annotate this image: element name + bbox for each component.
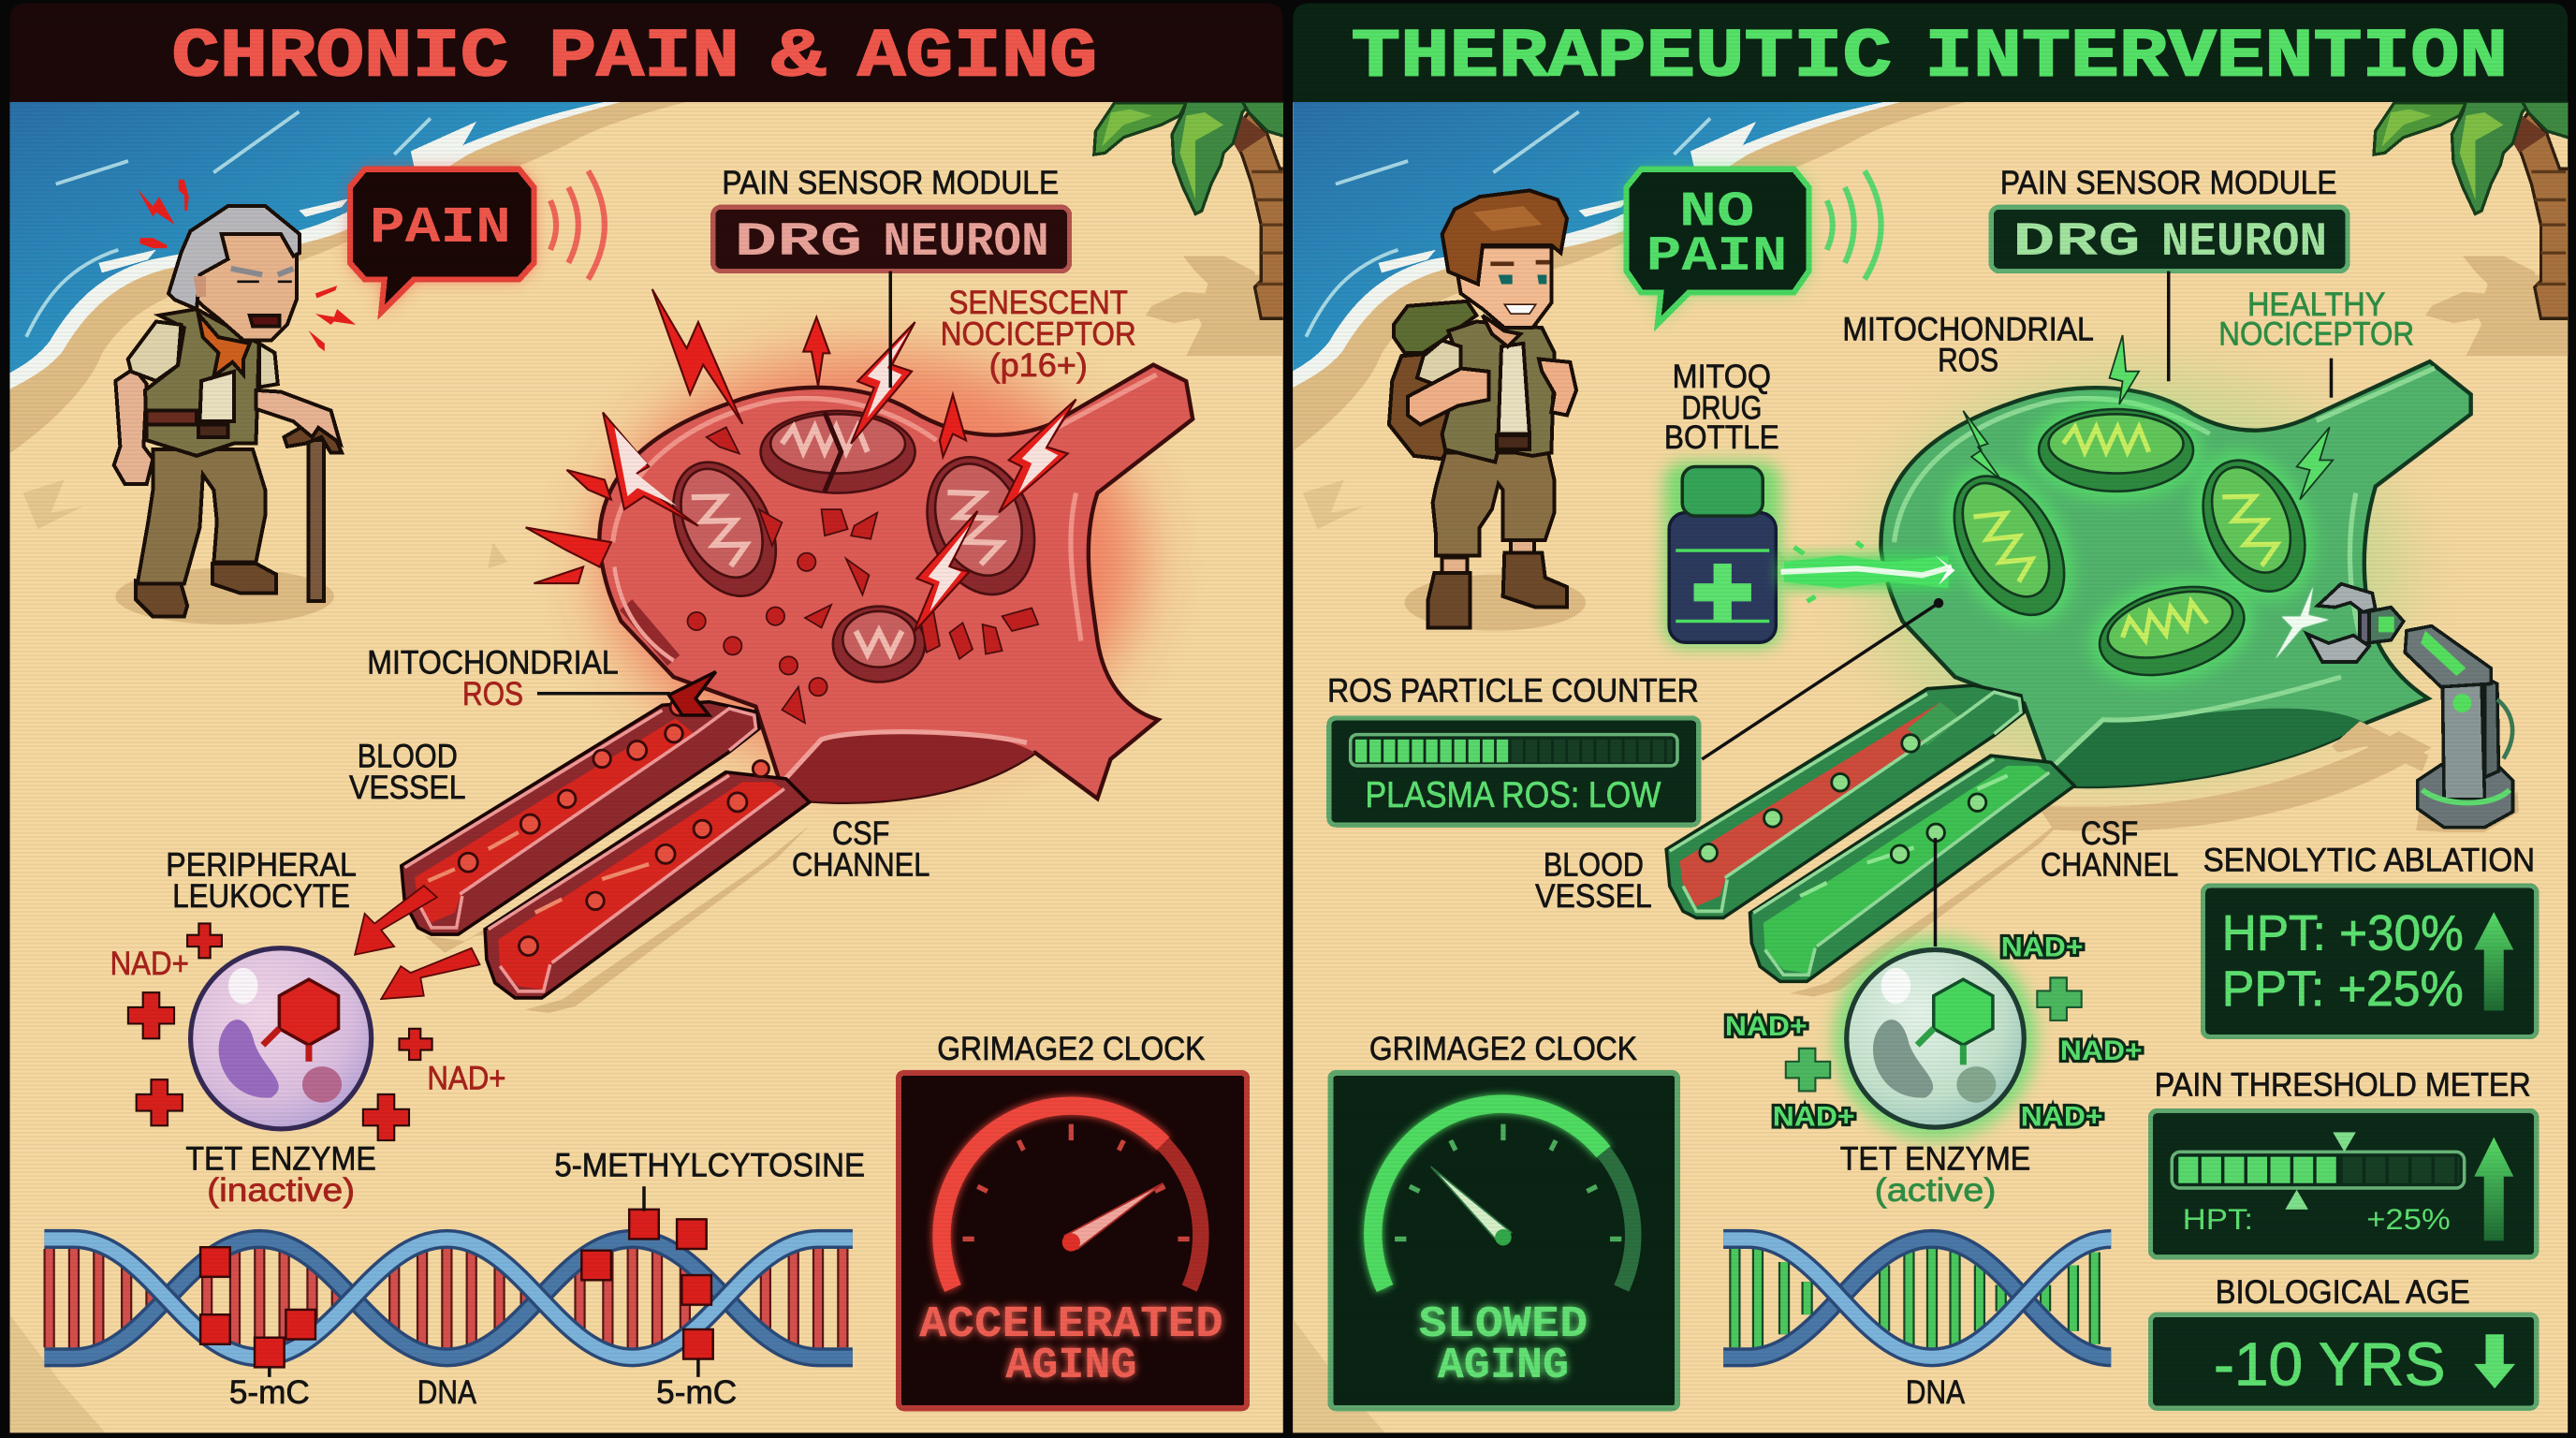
labels: 5-mC and DNA: 5-mC bbox=[656, 1374, 737, 1411]
small green bolts bbox=[1963, 335, 2333, 500]
title right: THERAPEUTIC bbox=[1352, 20, 1892, 97]
mitochondria damaged bbox=[653, 411, 1053, 682]
label: blood vessel: BLOOD bbox=[358, 739, 458, 775]
NAD+ plus signs bbox=[128, 923, 432, 1140]
label: TET enzyme inactive: TET ENZYME bbox=[185, 1141, 376, 1178]
box: DRG neuron bbox=[713, 207, 1070, 271]
label: pain sensor module: PAIN SENSOR MODULE bbox=[2000, 165, 2337, 201]
label: pain threshold meter: PAIN THRESHOLD METER bbox=[2155, 1067, 2531, 1104]
box: DRG neuron: NEURON bbox=[883, 216, 1049, 270]
panel: plasma ROS meter bbox=[1329, 718, 1699, 825]
icon: MitoQ bottle bbox=[1664, 462, 1781, 648]
label: NAD+: NAD+ bbox=[110, 946, 189, 982]
gauge text: ACCELERATED bbox=[919, 1300, 1223, 1350]
label: blood vessel bbox=[349, 739, 466, 806]
leader line: ROS counter to neuron bbox=[1702, 598, 1943, 759]
label: mitochondrial ROS bbox=[367, 645, 670, 712]
methyl groups bbox=[200, 1210, 713, 1367]
label: senolytic ablation: SENOLYTIC ABLATION bbox=[2203, 842, 2535, 878]
label: mitochondrial ROS: ROS bbox=[1938, 343, 1998, 379]
panel: accelerated aging gauge bbox=[899, 1073, 1247, 1408]
beach background right bbox=[1280, 101, 2576, 1436]
panel: chronic pain and aging bbox=[0, 4, 1298, 1436]
icon: down arrow bbox=[2474, 1334, 2515, 1388]
label: CSF channel: CHANNEL bbox=[2041, 847, 2178, 884]
panel: biological age: -10 YRS bbox=[2214, 1330, 2445, 1399]
icon: calm sound waves bbox=[1827, 171, 1881, 279]
title left: & bbox=[771, 20, 826, 97]
label: GrimAge2 clock: GRIMAGE2 CLOCK bbox=[937, 1031, 1206, 1067]
NAD+ tags and plus signs: NAD+ bbox=[1725, 1011, 1808, 1042]
mitochondria healthy bbox=[1918, 400, 2338, 702]
lightning bolts bbox=[526, 289, 1076, 633]
label: blood vessel: VESSEL bbox=[1535, 878, 1652, 915]
heading bar right bbox=[1293, 4, 2568, 102]
box: DRG neuron bbox=[1991, 207, 2348, 271]
panel: pain threshold meter: HPT: bbox=[2183, 1202, 2253, 1236]
panel: threshold gains: PPT: +25% bbox=[2222, 961, 2464, 1017]
beam: drug into neuron bbox=[1781, 542, 1955, 601]
label: TET enzyme active: (active) bbox=[1875, 1172, 1996, 1209]
icon: up arrow bbox=[2474, 1137, 2513, 1240]
NAD+ tags and plus signs: NAD+ bbox=[2021, 1101, 2103, 1132]
label: healthy nociceptor: NOCICEPTOR bbox=[2218, 316, 2414, 353]
title left: AGING bbox=[857, 20, 1097, 97]
gauge text bbox=[1419, 1300, 1588, 1391]
title left: PAIN bbox=[549, 20, 739, 97]
label: GrimAge2 clock: GRIMAGE2 CLOCK bbox=[1369, 1031, 1637, 1067]
box: DRG neuron: NEURON bbox=[2161, 216, 2327, 270]
ROS debris particles bbox=[688, 427, 1038, 723]
labels: 5-mC and DNA: DNA bbox=[417, 1374, 476, 1411]
label: blood vessel: VESSEL bbox=[349, 770, 466, 806]
label: healthy nociceptor bbox=[2218, 286, 2414, 353]
label: pain sensor module: PAIN SENSOR MODULE bbox=[722, 165, 1059, 201]
label: MitoQ drug bottle: DRUG bbox=[1681, 390, 1762, 427]
label: CSF channel: CHANNEL bbox=[792, 847, 929, 884]
panel: therapeutic intervention bbox=[1280, 4, 2576, 1436]
title left: CHRONIC bbox=[171, 20, 508, 97]
label: mitochondrial ROS: MITOCHONDRIAL bbox=[1842, 311, 2094, 347]
panel: threshold gains bbox=[2203, 886, 2537, 1037]
panel: plasma ROS meter: PLASMA ROS: LOW bbox=[1365, 775, 1661, 815]
speech bubble: pain bbox=[350, 169, 534, 312]
label: senescent nociceptor: SENESCENT bbox=[949, 285, 1128, 321]
diagram: senescent neuron bbox=[402, 289, 1193, 1013]
label: peripheral leukocyte: PERIPHERAL bbox=[166, 847, 357, 884]
NAD+ tags and plus signs bbox=[1725, 932, 2143, 1132]
label: blood vessel bbox=[1535, 847, 1652, 915]
icon: up arrow bbox=[2474, 912, 2513, 1010]
label: TET enzyme active: TET ENZYME bbox=[1840, 1141, 2030, 1178]
leukocyte cell active TET enzyme bbox=[1834, 936, 2037, 1140]
title left bbox=[171, 20, 1097, 97]
box: DRG neuron: DRG bbox=[735, 216, 862, 270]
panel: slowed aging gauge bbox=[1331, 1073, 1677, 1408]
label: TET enzyme inactive bbox=[185, 1141, 376, 1209]
label: MitoQ drug bottle: BOTTLE bbox=[1664, 419, 1779, 456]
neuron body bbox=[1881, 361, 2471, 786]
character: young hiker bbox=[1389, 190, 1586, 631]
label: CSF channel: CSF bbox=[832, 815, 889, 852]
label: senescent nociceptor: (p16+) bbox=[989, 347, 1088, 384]
bubble text: PAIN bbox=[370, 200, 511, 257]
NAD+ tags and plus signs: NAD+ bbox=[2001, 932, 2083, 963]
arrows: ROS to leukocyte bbox=[355, 886, 479, 999]
labels: 5-mC and DNA: 5-mC bbox=[229, 1374, 310, 1411]
spark bbox=[2276, 587, 2329, 659]
NAD+ tags and plus signs: NAD+ bbox=[1773, 1101, 1855, 1132]
diagram: healthy neuron bbox=[1666, 335, 2471, 996]
panel: pain threshold meter: +25% bbox=[2366, 1202, 2451, 1236]
label: mitochondrial ROS: ROS bbox=[462, 676, 523, 712]
label: peripheral leukocyte: LEUKOCYTE bbox=[172, 878, 350, 915]
label: mitochondrial ROS bbox=[1842, 311, 2094, 379]
label: 5-methylcytosine: 5-METHYLCYTOSINE bbox=[554, 1148, 865, 1184]
labels: 5-mC and DNA bbox=[229, 1374, 737, 1411]
panel: pain threshold meter bbox=[2150, 1111, 2537, 1257]
label: healthy nociceptor: HEALTHY bbox=[2247, 286, 2385, 323]
tubes: blood vessel and CSF channel bbox=[1666, 685, 2074, 996]
label: CSF channel: CSF bbox=[2081, 815, 2138, 852]
label: NAD+: NAD+ bbox=[427, 1061, 506, 1097]
label: peripheral leukocyte bbox=[166, 847, 357, 915]
robotic arm with ablation claw bbox=[2276, 584, 2519, 832]
label: CSF channel bbox=[792, 815, 929, 884]
label: DNA: DNA bbox=[1906, 1374, 1966, 1411]
label: biological age: BIOLOGICAL AGE bbox=[2216, 1274, 2470, 1311]
NAD+ tags and plus signs: NAD+ bbox=[2060, 1035, 2143, 1066]
beach background left bbox=[0, 101, 1298, 1436]
speech bubble: no pain bbox=[1627, 169, 1808, 324]
title right: INTERVENTION bbox=[1925, 20, 2508, 97]
label: blood vessel: BLOOD bbox=[1544, 847, 1644, 884]
leukocyte cell with TET enzyme bbox=[191, 948, 372, 1129]
character: old man with cane bbox=[114, 180, 356, 624]
label: CSF channel bbox=[2041, 815, 2178, 884]
box: DRG neuron: DRG bbox=[2012, 216, 2141, 270]
neuron body bbox=[599, 365, 1193, 802]
gauge text bbox=[919, 1300, 1223, 1391]
gauge text: SLOWED bbox=[1419, 1300, 1588, 1350]
speech bubble: no pain: PAIN bbox=[1647, 228, 1788, 285]
label: ROS particle counter: ROS PARTICLE COUNTER bbox=[1327, 672, 1699, 709]
label: mitochondrial ROS: MITOCHONDRIAL bbox=[367, 645, 619, 682]
bubble text: NO bbox=[1679, 183, 1754, 240]
gauge text: AGING bbox=[1438, 1342, 1569, 1391]
icon: pain sound waves bbox=[550, 171, 605, 279]
label: TET enzyme inactive: (inactive) bbox=[207, 1172, 355, 1209]
tubes: blood vessel and CSF channel bbox=[402, 671, 810, 1013]
DNA helix methylated bbox=[44, 1210, 853, 1367]
label: MitoQ drug bottle bbox=[1664, 359, 1779, 456]
DNA helix healthy bbox=[1723, 1239, 2111, 1357]
gauge text: AGING bbox=[1005, 1342, 1137, 1391]
panel: threshold gains: HPT: +30% bbox=[2222, 906, 2464, 961]
title right bbox=[1352, 20, 2508, 97]
label: TET enzyme active bbox=[1840, 1141, 2030, 1209]
label: senescent nociceptor: NOCICEPTOR bbox=[941, 316, 1136, 353]
heading bar left bbox=[10, 4, 1283, 102]
label: senescent nociceptor bbox=[941, 285, 1136, 384]
panel: biological age bbox=[2150, 1314, 2537, 1408]
label: MitoQ drug bottle: MITOQ bbox=[1673, 359, 1771, 395]
